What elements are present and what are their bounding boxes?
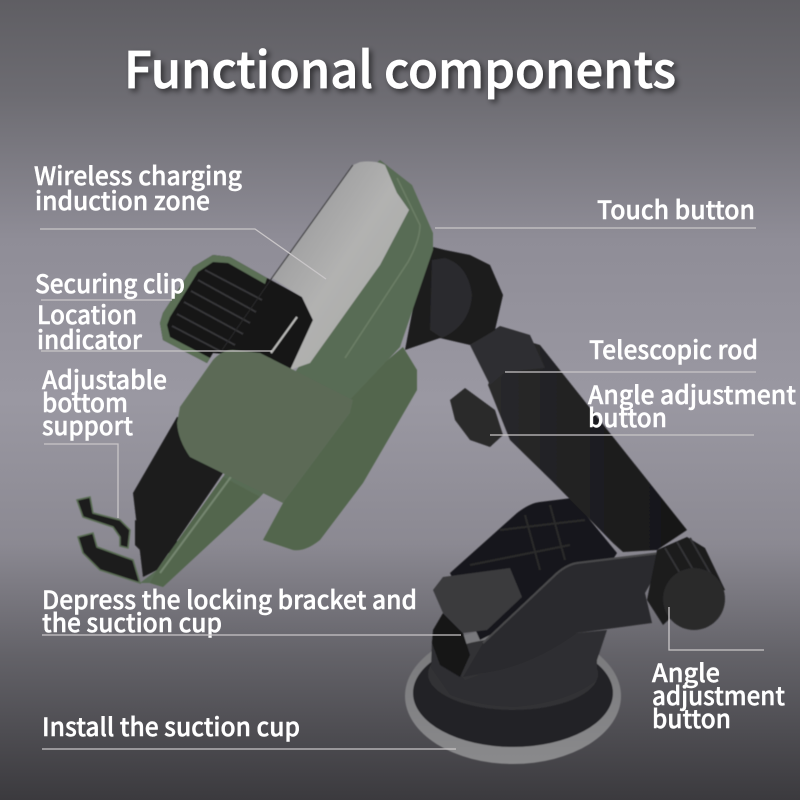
cradle back black (133, 417, 260, 577)
lever and bracket (432, 553, 664, 677)
callout: adjustable bottom support (42, 361, 167, 518)
wireless charging induction zone (272, 161, 409, 370)
callout: angle adjustment button (rear): adjustment (652, 677, 785, 713)
product: phone holder (77, 160, 725, 764)
green frame (140, 160, 433, 587)
callout: location indicator (37, 296, 272, 357)
callout: wireless charging induction zone (34, 157, 326, 279)
side angle button (450, 388, 503, 447)
callout: install the suction cup: Install the suction cup (42, 708, 300, 744)
callout: angle adjustment button (rear): button (652, 700, 731, 736)
callout: adjustable bottom support: bottom (42, 384, 128, 420)
location indicator strip (271, 317, 297, 353)
callout: telescopic rod: Telescopic rod (589, 331, 758, 367)
callout: wireless charging induction zone: Wireless charging (34, 157, 243, 193)
rear plate (450, 498, 617, 640)
callout: location indicator: indicator (37, 321, 143, 357)
callout: adjustable bottom support: support (42, 407, 133, 443)
telescopic rod (470, 326, 687, 552)
callout: location indicator: Location (37, 296, 137, 332)
callout: angle adjustment button (side) (490, 376, 796, 435)
securing clip (160, 255, 313, 370)
front clamp band (177, 350, 353, 503)
callout: angle adjustment button (side): Angle adjustment (588, 376, 796, 412)
callout: angle adjustment button (rear): Angle (652, 654, 720, 690)
title: Functional components (124, 31, 676, 103)
callout: wireless charging induction zone: induction zone (35, 182, 210, 218)
callout: touch button: Touch button (597, 191, 755, 227)
rear knob (647, 537, 725, 630)
suction cup base (405, 628, 621, 764)
callout: securing clip: Securing clip (35, 265, 185, 301)
callout: angle adjustment button (side): button (588, 399, 667, 435)
callout: adjustable bottom support: Adjustable (42, 361, 167, 397)
rear green shell (263, 347, 417, 550)
callout: angle adjustment button (rear) (652, 607, 785, 736)
callout: depress the locking bracket: Depress the locking bracket and (42, 581, 417, 617)
callout: depress the locking bracket (42, 581, 461, 640)
ball joint (405, 245, 503, 350)
bottom support hooks (77, 497, 177, 583)
callout: depress the locking bracket: the suction cup (42, 604, 222, 640)
